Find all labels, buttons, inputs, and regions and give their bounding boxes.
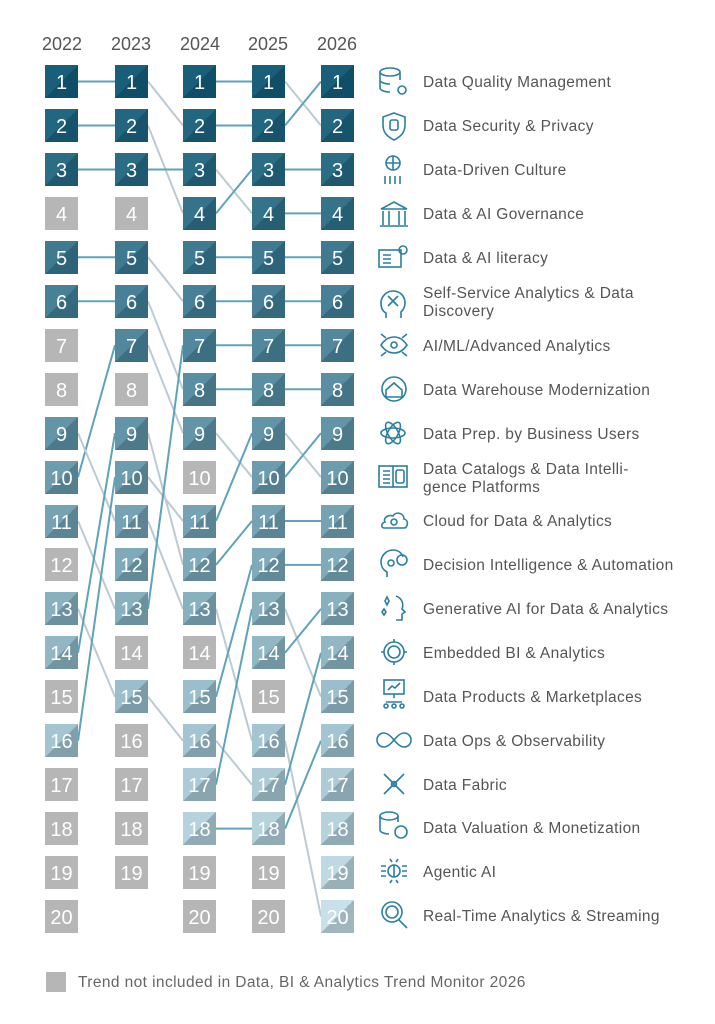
column 2022: 14 bbox=[50, 643, 73, 665]
column 2023: 9 bbox=[126, 424, 137, 446]
column 2024: 7 bbox=[194, 336, 205, 358]
trend labels: Agentic AI bbox=[423, 864, 496, 881]
trend labels: Real-Time Analytics & Streaming bbox=[423, 908, 660, 925]
trend labels bbox=[423, 74, 674, 925]
column 2023: 12 bbox=[120, 555, 143, 577]
column 2022: 9 bbox=[56, 424, 67, 446]
column 2025: 9 bbox=[263, 424, 274, 446]
icon: house cycle bbox=[382, 377, 406, 401]
icon: globe people bbox=[385, 156, 400, 184]
column 2025: 12 bbox=[257, 555, 280, 577]
trend labels: Data Products & Marketplaces bbox=[423, 689, 642, 706]
column 2024: 12 bbox=[188, 555, 211, 577]
column 2022 bbox=[45, 65, 78, 933]
trend labels: Data & AI literacy bbox=[423, 250, 548, 267]
column 2026 bbox=[321, 65, 354, 933]
column 2022: 13 bbox=[50, 599, 73, 621]
column 2023: 14 bbox=[120, 643, 143, 665]
column 2022: 8 bbox=[56, 380, 67, 402]
trend labels: Data Warehouse Modernization bbox=[423, 382, 650, 399]
column 2026: 8 bbox=[332, 380, 343, 402]
trend labels: Cloud for Data & Analytics bbox=[423, 513, 612, 530]
column 2024: 5 bbox=[194, 248, 205, 270]
connector lines 2025 to 2026 bbox=[285, 82, 321, 916]
trend labels: AI/ML/Advanced Analytics bbox=[423, 338, 611, 355]
connector lines 2023 to 2024 bbox=[148, 82, 183, 741]
column 2024: 6 bbox=[194, 292, 205, 314]
column 2023: 17 bbox=[120, 775, 143, 797]
column 2024: 13 bbox=[188, 599, 211, 621]
trend labels: Generative AI for Data & Analytics bbox=[423, 601, 668, 618]
column 2025: 20 bbox=[257, 907, 280, 929]
column 2025: 15 bbox=[257, 687, 280, 709]
column 2026: 1 bbox=[332, 72, 343, 94]
column 2023: 15 bbox=[120, 687, 143, 709]
column 2026: 15 bbox=[326, 687, 349, 709]
column 2026: 20 bbox=[326, 907, 349, 929]
column 2026: 4 bbox=[332, 204, 343, 226]
column 2022: 4 bbox=[56, 204, 67, 226]
column 2024: 1 bbox=[194, 72, 205, 94]
column 2026: 11 bbox=[327, 512, 348, 534]
column 2026: 16 bbox=[326, 731, 349, 753]
year headers: 2022 bbox=[42, 34, 82, 54]
column 2026: 18 bbox=[326, 819, 349, 841]
column 2025: 16 bbox=[257, 731, 280, 753]
column 2026: 2 bbox=[332, 116, 343, 138]
column 2026: 13 bbox=[326, 599, 349, 621]
trend labels: Decision Intelligence & Automation bbox=[423, 557, 674, 574]
column 2022: 2 bbox=[56, 116, 67, 138]
trend labels: Data Ops & Observability bbox=[423, 733, 605, 750]
year headers bbox=[42, 34, 357, 54]
trend labels: Discovery bbox=[423, 303, 494, 320]
column 2026: 9 bbox=[332, 424, 343, 446]
column 2026: 3 bbox=[332, 160, 343, 182]
icon: database gear bbox=[380, 68, 406, 94]
column 2022: 19 bbox=[50, 863, 73, 885]
column 2024: 9 bbox=[194, 424, 205, 446]
column 2026: 5 bbox=[332, 248, 343, 270]
column 2023: 19 bbox=[120, 863, 143, 885]
column 2023: 7 bbox=[126, 336, 137, 358]
icon: catalog book bbox=[379, 466, 407, 487]
column 2022: 15 bbox=[50, 687, 73, 709]
column 2023: 18 bbox=[120, 819, 143, 841]
icon: building bbox=[380, 202, 408, 226]
icon: gear chart bbox=[381, 639, 407, 665]
column 2023: 6 bbox=[126, 292, 137, 314]
icon: monitor network bbox=[384, 680, 404, 708]
column 2025: 7 bbox=[263, 336, 274, 358]
column 2022: 17 bbox=[50, 775, 73, 797]
column 2023: 8 bbox=[126, 380, 137, 402]
column 2023: 2 bbox=[126, 116, 137, 138]
column 2026: 19 bbox=[326, 863, 349, 885]
column 2023: 4 bbox=[126, 204, 137, 226]
column 2026: 12 bbox=[326, 555, 349, 577]
column 2024: 8 bbox=[194, 380, 205, 402]
column 2026: 7 bbox=[332, 336, 343, 358]
trend labels: Data Security & Privacy bbox=[423, 118, 594, 135]
column 2025: 10 bbox=[257, 468, 280, 490]
column 2025: 17 bbox=[257, 775, 280, 797]
column 2024: 2 bbox=[194, 116, 205, 138]
column 2023: 16 bbox=[120, 731, 143, 753]
column 2023: 3 bbox=[126, 160, 137, 182]
icon: head tools bbox=[381, 291, 405, 318]
column 2023: 10 bbox=[120, 468, 143, 490]
column 2025: 13 bbox=[257, 599, 280, 621]
column 2025: 8 bbox=[263, 380, 274, 402]
column 2022: 20 bbox=[50, 907, 73, 929]
column 2024: 17 bbox=[188, 775, 211, 797]
column 2022: 12 bbox=[50, 555, 73, 577]
column 2022: 11 bbox=[51, 512, 72, 534]
column 2024: 20 bbox=[188, 907, 211, 929]
column 2026: 10 bbox=[326, 468, 349, 490]
column 2024: 10 bbox=[188, 468, 211, 490]
year headers: 2025 bbox=[248, 34, 288, 54]
year headers: 2024 bbox=[180, 34, 220, 54]
column 2025: 5 bbox=[263, 248, 274, 270]
icon: database coin bbox=[380, 812, 407, 838]
column 2022: 10 bbox=[50, 468, 73, 490]
column 2022: 3 bbox=[56, 160, 67, 182]
connector lines 2022 to 2023 bbox=[78, 82, 115, 741]
trend labels: Data Prep. by Business Users bbox=[423, 426, 640, 443]
icon: infinity bbox=[377, 733, 411, 747]
trend labels: gence Platforms bbox=[423, 479, 540, 496]
column 2025: 3 bbox=[263, 160, 274, 182]
trend labels: Self-Service Analytics & Data bbox=[423, 285, 634, 302]
trend labels: Data & AI Governance bbox=[423, 206, 584, 223]
column 2024: 11 bbox=[189, 512, 210, 534]
column 2022: 1 bbox=[56, 72, 67, 94]
column 2025: 19 bbox=[257, 863, 280, 885]
column 2026: 17 bbox=[326, 775, 349, 797]
column 2024: 18 bbox=[188, 819, 211, 841]
column 2024: 4 bbox=[194, 204, 205, 226]
trend labels: Data-Driven Culture bbox=[423, 162, 567, 179]
column 2025: 4 bbox=[263, 204, 274, 226]
icon: eye wrench bbox=[381, 334, 407, 356]
connector lines 2024 to 2025 bbox=[216, 82, 252, 829]
column 2024: 16 bbox=[188, 731, 211, 753]
column 2023 bbox=[115, 65, 148, 889]
icon: genai face bbox=[382, 596, 405, 620]
column 2023: 13 bbox=[120, 599, 143, 621]
column 2023: 1 bbox=[126, 72, 137, 94]
year headers: 2026 bbox=[317, 34, 357, 54]
trend labels: Embedded BI & Analytics bbox=[423, 645, 605, 662]
icon: shield bbox=[383, 113, 405, 140]
trend labels: Data Quality Management bbox=[423, 74, 611, 91]
column 2026: 6 bbox=[332, 292, 343, 314]
icon: fabric nodes bbox=[384, 774, 404, 794]
column 2022: 7 bbox=[56, 336, 67, 358]
column 2023: 5 bbox=[126, 248, 137, 270]
icon: magnifier clock bbox=[382, 902, 407, 928]
icons column bbox=[377, 68, 411, 928]
column 2025: 1 bbox=[263, 72, 274, 94]
column 2025: 14 bbox=[257, 643, 280, 665]
column 2022: 6 bbox=[56, 292, 67, 314]
column 2025: 2 bbox=[263, 116, 274, 138]
icon: atom bbox=[381, 420, 405, 446]
column 2022: 16 bbox=[50, 731, 73, 753]
column 2024 bbox=[183, 65, 216, 933]
column 2022: 18 bbox=[50, 819, 73, 841]
legend: Trend not included in Data, BI & Analytics Trend Monitor 2026 bbox=[78, 974, 526, 991]
column 2022: 5 bbox=[56, 248, 67, 270]
trend labels: Data Fabric bbox=[423, 777, 507, 794]
column 2026: 14 bbox=[326, 643, 349, 665]
icon: cloud bbox=[382, 513, 407, 528]
column 2024: 3 bbox=[194, 160, 205, 182]
column 2025: 11 bbox=[258, 512, 279, 534]
column 2025: 6 bbox=[263, 292, 274, 314]
column 2024: 15 bbox=[188, 687, 211, 709]
column 2025: 18 bbox=[257, 819, 280, 841]
column 2024: 19 bbox=[188, 863, 211, 885]
year headers: 2023 bbox=[111, 34, 151, 54]
icon: head bulb bbox=[381, 550, 407, 577]
icon: book gear bbox=[379, 246, 407, 267]
icon: brain chip bbox=[381, 859, 407, 883]
column 2024: 14 bbox=[188, 643, 211, 665]
trend labels: Data Valuation & Monetization bbox=[423, 820, 641, 837]
column 2023: 11 bbox=[121, 512, 142, 534]
column 2025 bbox=[252, 65, 285, 933]
trend labels: Data Catalogs & Data Intelli- bbox=[423, 461, 629, 478]
